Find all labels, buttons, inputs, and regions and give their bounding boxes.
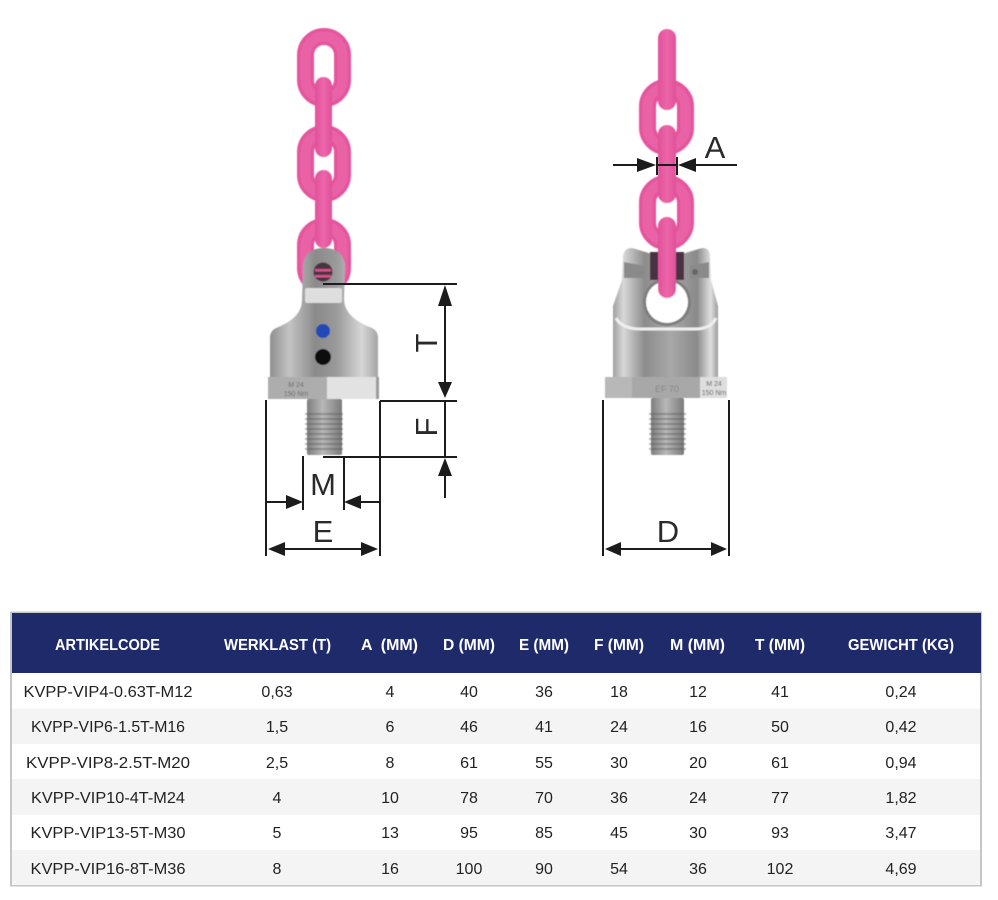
row: KVPP-VIP16-8T-M36 <box>30 861 917 878</box>
right product view: swivel point from the front <box>605 29 727 455</box>
row: KVPP-VIP8-2.5T-M20: 8 <box>386 755 395 772</box>
row: KVPP-VIP8-2.5T-M20: KVPP-VIP8-2.5T-M20 <box>26 755 190 772</box>
hex collar: right view: EF 70 <box>655 384 679 394</box>
row: KVPP-VIP13-5T-M30: 85 <box>535 825 553 842</box>
row: KVPP-VIP6-1.5T-M16: 46 <box>460 719 478 736</box>
row: KVPP-VIP6-1.5T-M16 <box>31 719 917 736</box>
specification table <box>11 612 981 886</box>
table header <box>12 613 981 673</box>
row: KVPP-VIP8-2.5T-M20: 30 <box>610 755 628 772</box>
row: KVPP-VIP10-4T-M24: 70 <box>535 790 553 807</box>
dimension A <box>613 130 737 175</box>
row: KVPP-VIP13-5T-M30: 45 <box>610 825 628 842</box>
dimension E: E <box>313 514 333 549</box>
table header: E (MM) <box>519 637 569 654</box>
hex collar: right view <box>605 377 727 398</box>
row: KVPP-VIP4-0.63T-M12: 0,24 <box>885 684 917 701</box>
hex collar: right view: 150 Nm <box>702 390 726 397</box>
row: KVPP-VIP8-2.5T-M20: 2,5 <box>266 755 288 772</box>
row: KVPP-VIP16-8T-M36: KVPP-VIP16-8T-M36 <box>30 861 186 878</box>
row: KVPP-VIP16-8T-M36: 8 <box>273 861 282 878</box>
row: KVPP-VIP6-1.5T-M16: 6 <box>386 719 395 736</box>
row: KVPP-VIP10-4T-M24: 1,82 <box>885 790 917 807</box>
dimension E <box>266 400 380 556</box>
table header: ARTIKELCODE <box>55 637 160 654</box>
row: KVPP-VIP4-0.63T-M12: 18 <box>610 684 628 701</box>
row: KVPP-VIP13-5T-M30 <box>30 825 917 842</box>
dimension A: A <box>705 130 726 165</box>
row: KVPP-VIP10-4T-M24: 10 <box>381 790 399 807</box>
dimension M <box>266 456 380 510</box>
dimension M: M <box>310 467 336 502</box>
row: KVPP-VIP13-5T-M30: 95 <box>460 825 478 842</box>
right dimension lines <box>603 130 737 556</box>
chain: right view <box>648 29 686 298</box>
row: KVPP-VIP4-0.63T-M12: 40 <box>460 684 478 701</box>
row: KVPP-VIP10-4T-M24: 77 <box>771 790 789 807</box>
left product view: swivel point from the side <box>268 36 379 455</box>
row: KVPP-VIP8-2.5T-M20: 61 <box>460 755 478 772</box>
row: KVPP-VIP16-8T-M36: 102 <box>767 861 793 878</box>
row: KVPP-VIP6-1.5T-M16: KVPP-VIP6-1.5T-M16 <box>31 719 185 736</box>
hex collar: right view: M 24 <box>706 381 722 388</box>
row: KVPP-VIP6-1.5T-M16: 16 <box>689 719 707 736</box>
row: KVPP-VIP6-1.5T-M16: 41 <box>535 719 553 736</box>
row: KVPP-VIP8-2.5T-M20: 20 <box>689 755 707 772</box>
row: KVPP-VIP16-8T-M36: 36 <box>689 861 707 878</box>
dimension D: D <box>657 514 679 549</box>
row: KVPP-VIP8-2.5T-M20 <box>26 755 917 772</box>
row: KVPP-VIP13-5T-M30: 3,47 <box>885 825 917 842</box>
table header: A (MM) <box>361 637 418 654</box>
row: KVPP-VIP8-2.5T-M20: 55 <box>535 755 553 772</box>
swivel body: right view <box>613 248 718 377</box>
row: KVPP-VIP4-0.63T-M12: 0,63 <box>261 684 293 701</box>
row: KVPP-VIP4-0.63T-M12: 41 <box>771 684 789 701</box>
table header: M (MM) <box>670 637 725 654</box>
threaded bolt: right view <box>649 398 686 455</box>
left dimension lines <box>266 284 457 556</box>
row: KVPP-VIP16-8T-M36: 4,69 <box>885 861 917 878</box>
row: KVPP-VIP4-0.63T-M12: 4 <box>386 684 395 701</box>
row: KVPP-VIP6-1.5T-M16: 1,5 <box>266 719 288 736</box>
hex collar: left view: M 24 <box>288 382 304 389</box>
hex collar: left view: 150 Nm <box>284 391 308 398</box>
row: KVPP-VIP10-4T-M24 <box>31 790 917 807</box>
row: KVPP-VIP6-1.5T-M16: 0,42 <box>885 719 917 736</box>
row: KVPP-VIP13-5T-M30: KVPP-VIP13-5T-M30 <box>30 825 186 842</box>
row: KVPP-VIP16-8T-M36: 16 <box>381 861 399 878</box>
row: KVPP-VIP16-8T-M36: 54 <box>610 861 628 878</box>
row: KVPP-VIP13-5T-M30: 30 <box>689 825 707 842</box>
row: KVPP-VIP10-4T-M24: 78 <box>460 790 478 807</box>
row: KVPP-VIP4-0.63T-M12 <box>24 684 917 701</box>
row: KVPP-VIP6-1.5T-M16: 24 <box>610 719 628 736</box>
row: KVPP-VIP8-2.5T-M20: 61 <box>771 755 789 772</box>
row: KVPP-VIP16-8T-M36: 100 <box>456 861 482 878</box>
table header: T (MM) <box>755 637 805 654</box>
table header: GEWICHT (KG) <box>848 637 954 654</box>
row: KVPP-VIP4-0.63T-M12: 36 <box>535 684 553 701</box>
row: KVPP-VIP10-4T-M24: 24 <box>689 790 707 807</box>
table header: F (MM) <box>594 637 644 654</box>
row: KVPP-VIP13-5T-M30: 13 <box>381 825 399 842</box>
row: KVPP-VIP4-0.63T-M12: KVPP-VIP4-0.63T-M12 <box>24 684 193 701</box>
threaded bolt: left view <box>305 399 343 455</box>
hex collar: left view <box>268 377 379 399</box>
dimension T <box>323 284 457 398</box>
dimension D <box>603 400 729 556</box>
swivel body: left view <box>270 248 378 377</box>
chain: left view <box>306 36 342 286</box>
row: KVPP-VIP8-2.5T-M20: 0,94 <box>885 755 917 772</box>
dimension F: F <box>409 418 444 436</box>
row: KVPP-VIP13-5T-M30: 5 <box>273 825 282 842</box>
row: KVPP-VIP16-8T-M36: 90 <box>535 861 553 878</box>
table header: WERKLAST (T) <box>224 637 331 654</box>
row: KVPP-VIP4-0.63T-M12: 12 <box>689 684 707 701</box>
dimension F <box>323 401 457 498</box>
table header: D (MM) <box>443 637 495 654</box>
row: KVPP-VIP13-5T-M30: 93 <box>771 825 789 842</box>
row: KVPP-VIP10-4T-M24: 4 <box>273 790 282 807</box>
row: KVPP-VIP6-1.5T-M16: 50 <box>771 719 789 736</box>
row: KVPP-VIP10-4T-M24: KVPP-VIP10-4T-M24 <box>31 790 185 807</box>
dimension T: T <box>409 333 444 352</box>
row: KVPP-VIP10-4T-M24: 36 <box>610 790 628 807</box>
